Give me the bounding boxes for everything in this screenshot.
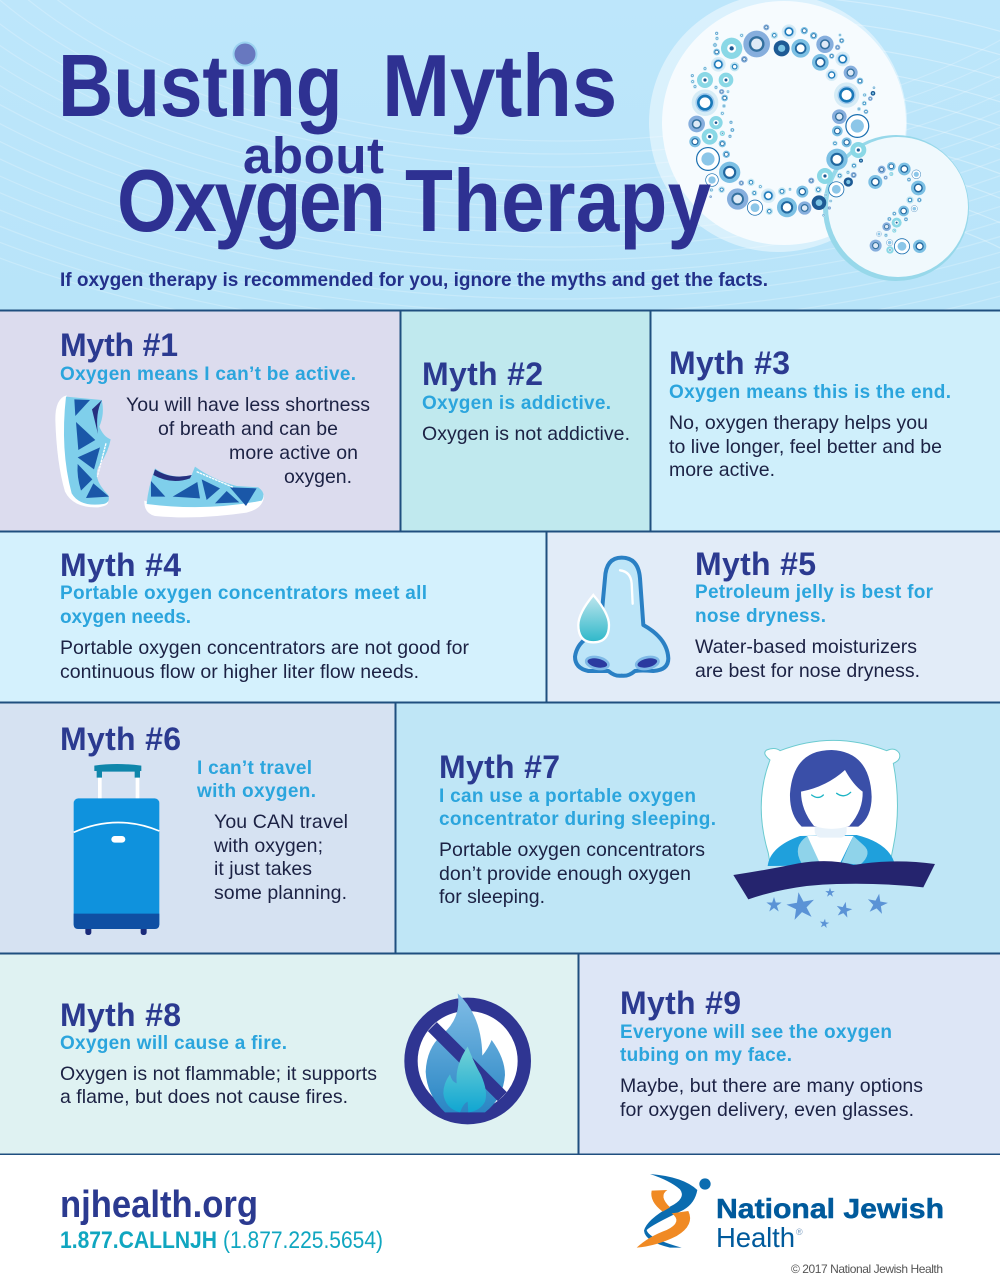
panel: myth 2: Oxygen is addictive. <box>422 393 611 414</box>
panel: myth 9 <box>578 953 1000 1154</box>
contact details: 1.877.CALLNJH <box>60 1227 217 1254</box>
panel: myth 2 <box>400 310 650 531</box>
panel: myth 2: Oxygen is not addictive. <box>422 423 630 445</box>
panel: myth 4: Myth #4 <box>60 547 181 583</box>
logo: National Jewish Health: Health <box>716 1222 795 1253</box>
panel: myth 5: Water-based moisturizers <box>695 636 917 658</box>
icon: nose with droplet <box>575 558 668 676</box>
panel: myth 2: Myth #2 <box>422 356 543 392</box>
subtitle: If oxygen therapy is recommended for you, ignore the myths and get the facts. <box>60 270 768 291</box>
panel: myth 5: are best for nose dryness. <box>695 660 920 682</box>
panel: myth 8: Oxygen will cause a fire. <box>60 1033 287 1054</box>
panel: myth 7: don’t provide enough oxygen <box>439 863 691 885</box>
panel: myth 3 <box>650 310 1000 531</box>
panel: myth 1: You will have less shortness <box>126 394 370 416</box>
panel: myth 5 <box>546 531 1000 702</box>
panel: myth 8: Myth #8 <box>60 997 181 1033</box>
icon: suitcase <box>74 764 159 935</box>
panel: myth 7: I can use a portable oxygen <box>439 786 696 807</box>
panel: myth 4: Portable oxygen concentrators meet all <box>60 583 427 604</box>
panel: myth 5: Petroleum jelly is best for <box>695 582 934 603</box>
footer <box>0 1155 1000 1279</box>
panel: myth 6: I can’t travel <box>197 758 312 779</box>
panel: myth 8: a flame, but does not cause fires. <box>60 1086 348 1108</box>
logo: National Jewish Health: ® <box>796 1227 803 1237</box>
title: Therapy <box>405 152 711 250</box>
panel: myth 9: tubing on my face. <box>620 1045 792 1066</box>
panel: myth 7: concentrator during sleeping. <box>439 809 716 830</box>
panel: myth 3: No, oxygen therapy helps you <box>669 412 928 434</box>
panel: myth 1: Myth #1 <box>60 327 178 363</box>
contact details <box>60 1184 383 1254</box>
panel: myth 3: Myth #3 <box>669 345 790 381</box>
panel: myth 6: some planning. <box>214 882 347 904</box>
logo: National Jewish Health: © 2017 National Jewish Health <box>791 1262 943 1276</box>
contact details: njhealth.org <box>60 1184 258 1226</box>
logo: National Jewish Health: National Jewish <box>716 1193 944 1224</box>
icon: no fire symbol <box>411 993 524 1118</box>
panel: myth 9: for oxygen delivery, even glasses. <box>620 1099 914 1121</box>
panel: myth 1: oxygen. <box>284 466 352 488</box>
panel: myth 4 <box>0 531 546 702</box>
panel: myth 1: more active on <box>229 442 358 464</box>
panel: myth 1: of breath and can be <box>158 418 338 440</box>
panel: myth 3: Oxygen means this is the end. <box>669 382 951 403</box>
panel: myth 7 <box>395 702 1000 953</box>
panel: myth 5: nose dryness. <box>695 606 826 627</box>
title: Busting <box>58 37 342 135</box>
panel: myth 3: to live longer, feel better and be <box>669 436 942 458</box>
panel: myth 6: You CAN travel <box>214 811 348 833</box>
contact details: (1.877.225.5654) <box>223 1227 383 1254</box>
panel: myth 4: oxygen needs. <box>60 607 191 628</box>
panel: myth 4: Portable oxygen concentrators are not good for <box>60 637 470 659</box>
panel: myth 5: Myth #5 <box>695 546 816 582</box>
panel: myth 6 <box>0 702 395 953</box>
title: about <box>243 127 384 184</box>
panel: myth 1: Oxygen means I can’t be active. <box>60 364 356 385</box>
icon: sleeping person <box>733 740 935 928</box>
panel: myth 6: with oxygen. <box>196 781 316 802</box>
panel: myth 3: more active. <box>669 459 775 481</box>
header background <box>0 0 1000 310</box>
title: Myths <box>382 37 617 136</box>
panel: myth 6: it just takes <box>214 858 312 880</box>
panel: myth 1 <box>0 310 400 531</box>
panel: myth 4: continuous flow or higher liter flow needs. <box>60 661 419 683</box>
panel: myth 9: Myth #9 <box>620 985 741 1021</box>
panel: myth 8: Oxygen is not flammable; it supports <box>60 1063 377 1085</box>
panel: myth 6: with oxygen; <box>213 835 323 857</box>
panel: myth 6: Myth #6 <box>60 721 181 757</box>
title: Oxygen <box>117 152 386 250</box>
panel: myth 9: Maybe, but there are many options <box>620 1075 923 1097</box>
icon: O2 symbol made of bubbles <box>649 0 969 281</box>
panel: myth 9: Everyone will see the oxygen <box>620 1022 892 1043</box>
icon: running shoes <box>55 395 264 517</box>
panel: myth 8 <box>0 953 578 1154</box>
logo: National Jewish Health <box>637 1174 944 1276</box>
title <box>58 37 711 250</box>
panel: myth 7: for sleeping. <box>439 886 545 908</box>
panel: myth 7: Myth #7 <box>439 749 560 785</box>
panel: myth 7: Portable oxygen concentrators <box>439 839 705 861</box>
